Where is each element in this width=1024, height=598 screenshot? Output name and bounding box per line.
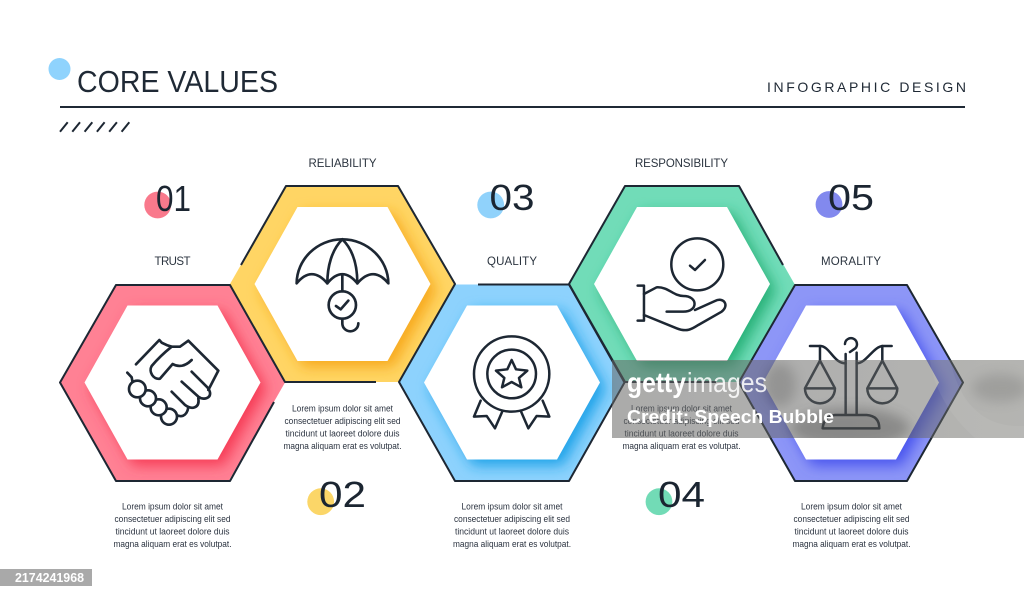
number 05 — [816, 177, 874, 218]
hexagon: trust (red) — [60, 284, 285, 480]
text block: quality: Lorem ipsum dolor sit amet — [462, 502, 563, 512]
title: CORE VALUES — [77, 64, 278, 99]
label: quality: QUALITY — [487, 256, 537, 268]
number 03: 03 — [490, 177, 534, 218]
label: morality: MORALITY — [821, 256, 881, 268]
text block: reliability: Lorem ipsum dolor sit amet — [292, 404, 393, 414]
text block: responsibility: Lorem ipsum dolor sit amet — [631, 404, 732, 414]
title accent dot — [48, 58, 70, 80]
text block: trust: magna aliquam erat es volutpat. — [114, 539, 232, 549]
icon: balance scale — [805, 338, 897, 428]
number 03 — [477, 177, 534, 218]
subtitle: INFOGRAPHIC DESIGN — [767, 79, 966, 95]
number 01 — [144, 178, 191, 219]
text block: morality — [792, 502, 910, 549]
icon: handshake — [127, 340, 218, 425]
label: responsibility: RESPONSIBILITY — [635, 158, 728, 170]
text block: morality: tincidunt ut laoreet dolore duis — [794, 526, 909, 536]
text block: reliability — [284, 404, 402, 451]
number 05: 05 — [828, 177, 874, 218]
hexagon: morality (purple) — [738, 284, 964, 480]
text block: quality: magna aliquam erat es volutpat. — [453, 539, 571, 549]
number 01: 01 — [156, 178, 191, 219]
text block: morality: magna aliquam erat es volutpat. — [792, 539, 910, 549]
icon: hand holding check — [638, 238, 725, 330]
label: reliability: RELIABILITY — [308, 158, 377, 170]
text block: trust: tincidunt ut laoreet dolore duis — [116, 526, 230, 536]
watermark band: images — [687, 367, 767, 398]
text block: trust — [114, 502, 232, 549]
icon: umbrella with check — [297, 239, 388, 331]
text block: quality — [453, 502, 571, 549]
text block: quality: consectetuer adipiscing elit sed — [454, 514, 570, 524]
text block: quality: tincidunt ut laoreet dolore duis — [455, 526, 569, 536]
number 04 — [646, 474, 705, 515]
text block: morality: consectetuer adipiscing elit sed — [794, 514, 910, 524]
text block: responsibility: consectetuer adipiscing elit sed — [624, 416, 740, 426]
text block: responsibility: magna aliquam erat es volutpat. — [622, 441, 740, 451]
number 02 — [307, 474, 366, 515]
text block: morality: Lorem ipsum dolor sit amet — [801, 502, 902, 512]
image id badge: 2174241968 — [15, 571, 84, 585]
label: trust: TRUST — [154, 256, 190, 268]
number 04: 04 — [658, 474, 705, 515]
text block: reliability: tincidunt ut laoreet dolore duis — [286, 428, 400, 438]
number 02: 02 — [319, 474, 366, 515]
watermark band — [612, 360, 1024, 438]
text block: trust: consectetuer adipiscing elit sed — [114, 514, 230, 524]
text block: reliability: consectetuer adipiscing elit sed — [284, 416, 400, 426]
watermark band: Credit: Speech Bubble — [627, 406, 834, 427]
icon: award medal with star — [474, 336, 549, 428]
image id badge — [0, 569, 92, 586]
hexagon: reliability (yellow) — [230, 186, 455, 382]
text block: trust: Lorem ipsum dolor sit amet — [122, 502, 223, 512]
text block: responsibility: tincidunt ut laoreet dolore duis — [624, 428, 739, 438]
hexagon: quality (blue) — [400, 284, 624, 480]
text block: responsibility — [622, 404, 740, 451]
hexagon: responsibility (green) — [570, 186, 794, 382]
text block: reliability: magna aliquam erat es volutpat. — [284, 441, 402, 451]
watermark band: getty — [627, 367, 686, 398]
